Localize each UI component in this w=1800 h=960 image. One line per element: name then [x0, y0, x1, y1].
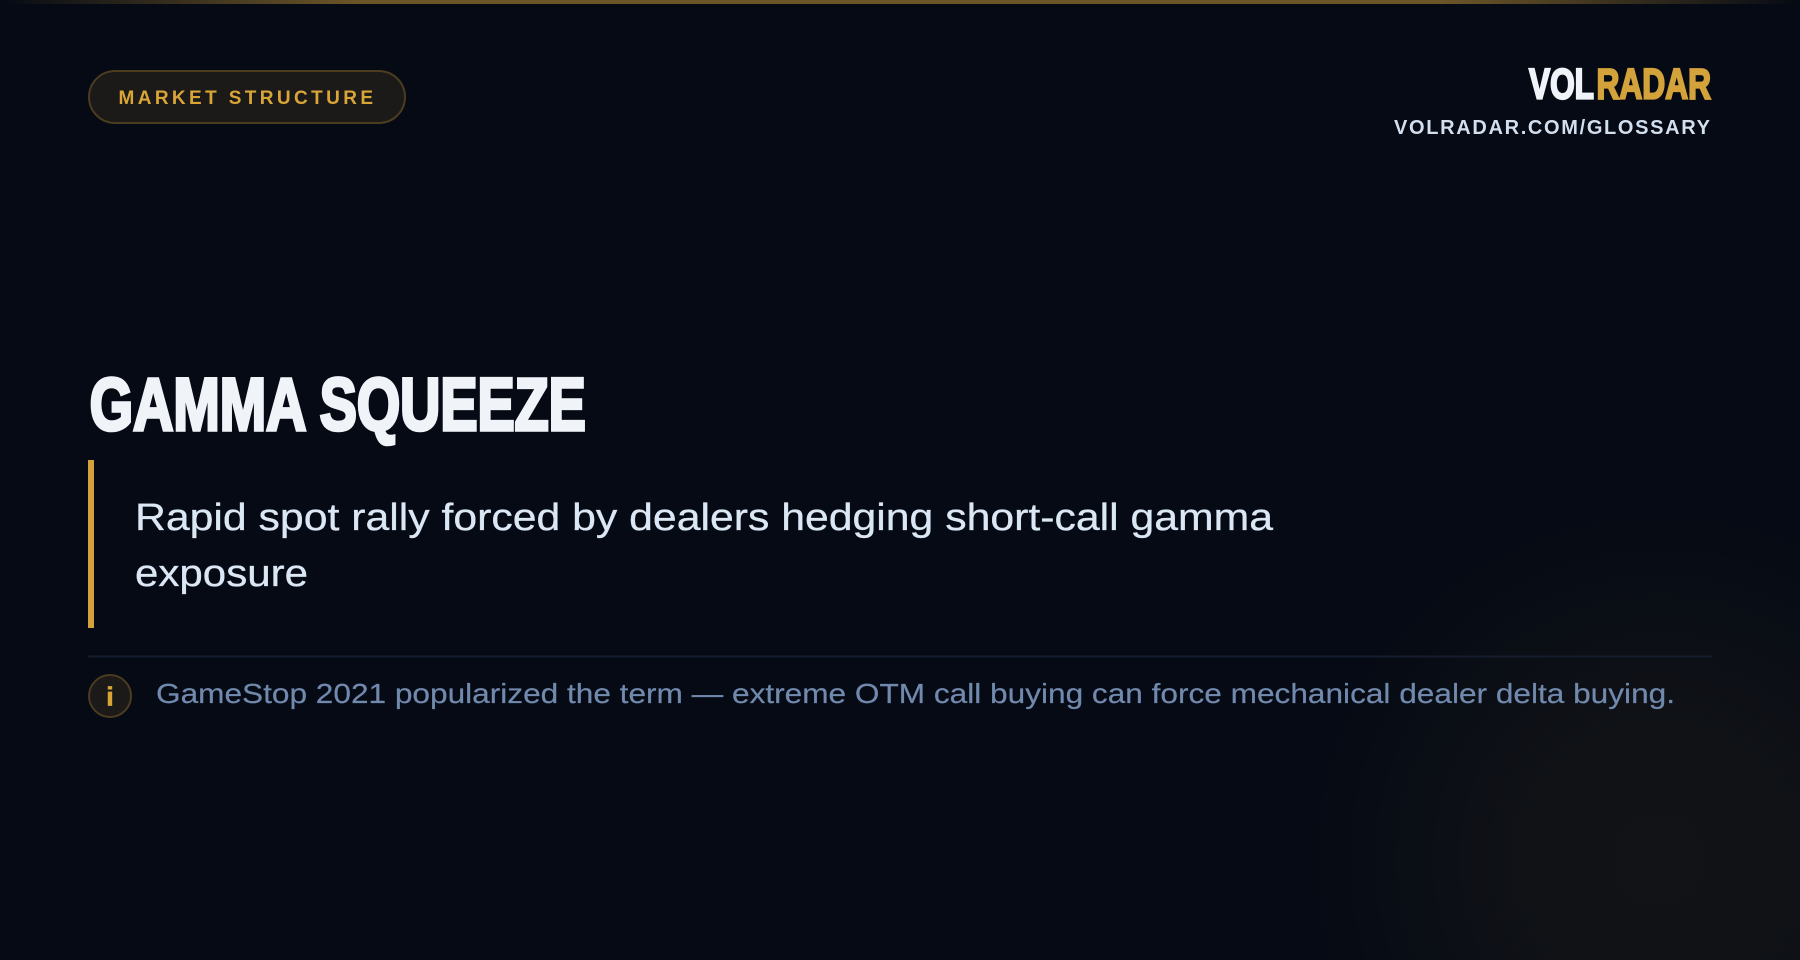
category pill — [89, 71, 405, 123]
top accent bar — [0, 0, 1800, 4]
brand logo — [1529, 61, 1711, 108]
note text: GameStop 2021 popularized the term — extreme OTM call buying can force mechanical dealer delta buying. — [156, 678, 1675, 709]
brand url: VOLRADAR.COM/GLOSSARY — [1394, 117, 1711, 139]
brand logo: RADAR — [1596, 61, 1711, 108]
brand logo: VOL — [1529, 61, 1594, 108]
definition text: exposure — [135, 553, 308, 595]
icon: info: i — [106, 682, 114, 712]
icon: info — [89, 675, 131, 717]
definition text — [135, 497, 1274, 595]
definition block — [88, 460, 1274, 628]
note row — [89, 675, 1675, 717]
accent bar — [88, 460, 94, 628]
definition text: Rapid spot rally forced by dealers hedging short-call gamma — [135, 497, 1274, 539]
category pill: MARKET STRUCTURE — [118, 88, 373, 109]
corner glow — [1300, 500, 1800, 960]
title: GAMMA SQUEEZE — [90, 363, 586, 446]
